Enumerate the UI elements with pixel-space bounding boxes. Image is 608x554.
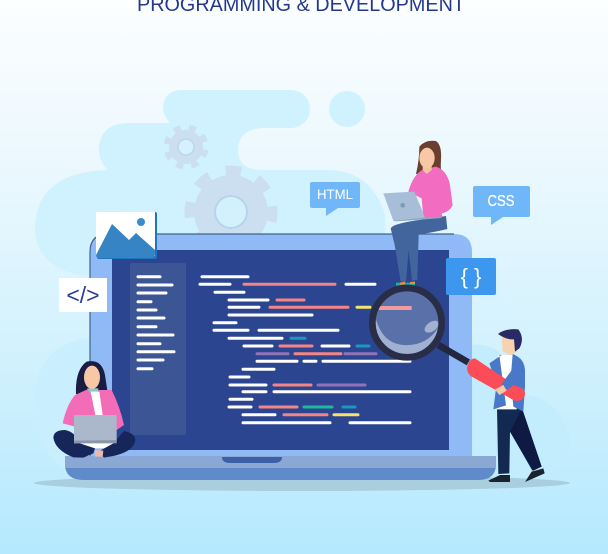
background blobs bbox=[35, 90, 570, 480]
badge: HTML bbox=[310, 182, 360, 216]
badge: CSS bbox=[473, 186, 530, 225]
man's arm and hand over handle bbox=[495, 363, 525, 395]
laptop screen bbox=[112, 250, 449, 450]
laptop base bbox=[65, 456, 496, 480]
white code bbox=[200, 277, 410, 423]
person: man holding magnifier bbox=[488, 329, 545, 482]
magnifying glass bbox=[372, 288, 525, 401]
person: woman sitting on laptop bbox=[383, 141, 453, 286]
icon: code tag card: </> bbox=[66, 282, 100, 308]
icon: image card bbox=[96, 212, 157, 259]
badge: curly braces: { } bbox=[461, 264, 481, 289]
code lines bbox=[200, 277, 410, 423]
laptop body bbox=[90, 234, 472, 458]
green code bbox=[304, 406, 332, 408]
badge: HTML: HTML bbox=[317, 186, 353, 202]
sidebar panel bbox=[130, 263, 186, 435]
purple code bbox=[257, 354, 376, 385]
icon: large gear bbox=[186, 167, 276, 257]
icon: small gear bbox=[165, 126, 207, 168]
shadow bbox=[34, 475, 570, 491]
yellow code bbox=[334, 307, 370, 415]
icon: code tag card bbox=[59, 278, 107, 312]
teal code bbox=[291, 338, 369, 407]
laptop bbox=[65, 234, 496, 480]
person: woman sitting cross-legged bbox=[53, 361, 135, 458]
salmon code bbox=[244, 284, 348, 415]
badge: CSS: CSS bbox=[488, 193, 514, 210]
sidebar code lines bbox=[138, 277, 174, 369]
badge: curly braces bbox=[446, 258, 496, 295]
